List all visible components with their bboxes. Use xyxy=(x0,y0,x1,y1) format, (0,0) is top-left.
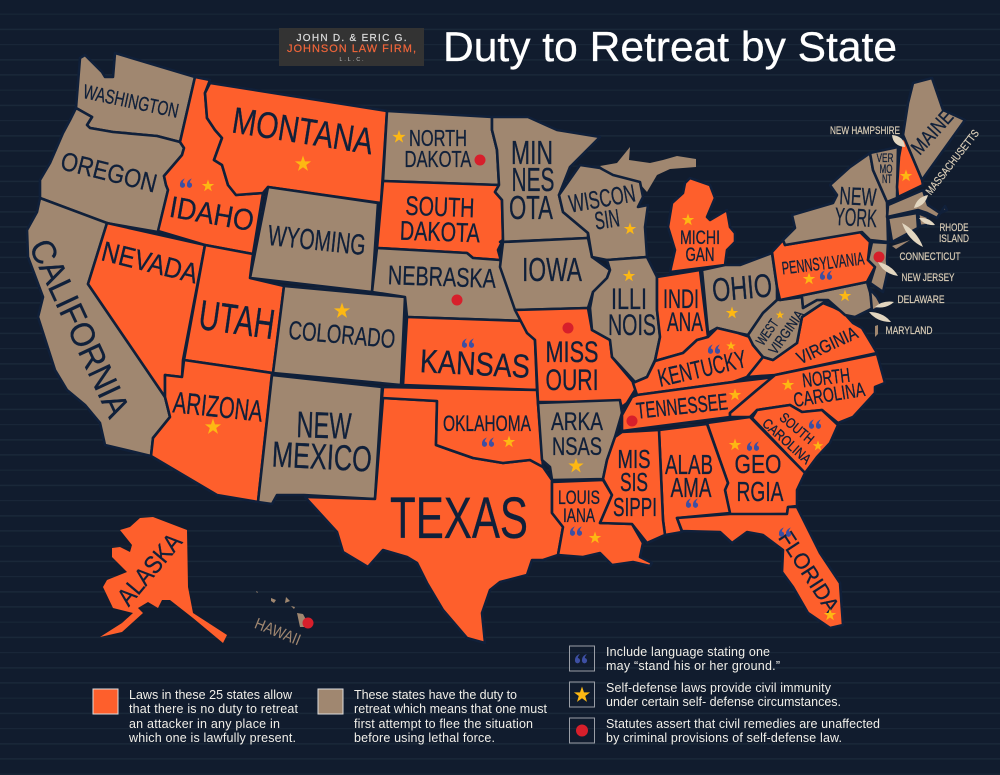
callout: Connecticut: CONNECTICUT xyxy=(900,251,961,263)
state: Missouri: MISS xyxy=(546,336,598,369)
state: Iowa xyxy=(500,238,610,310)
state: Michigan: MICHI xyxy=(680,228,720,249)
legend text: Laws in these 25 states allow xyxy=(129,688,293,702)
star marker xyxy=(682,214,694,225)
legend text: by criminal provisions of self-defense law. xyxy=(606,731,842,745)
callout: New Jersey xyxy=(878,262,955,284)
state: Mississippi: SIS xyxy=(620,467,648,497)
callout: Massachusetts xyxy=(914,128,982,208)
legend text: Statutes assert that civil remedies are unaffected xyxy=(606,717,880,731)
star marker xyxy=(503,436,515,447)
callout: New Hampshire: NEW HAMPSHIRE xyxy=(830,125,900,137)
state: Oklahoma: OKLAHOMA xyxy=(443,411,531,436)
state: Colorado xyxy=(273,286,405,385)
state: Minnesota: NES xyxy=(512,161,554,198)
star marker xyxy=(813,440,823,450)
star marker xyxy=(776,310,784,319)
logo: Johnson Law Firm: JOHNSON LAW FIRM, xyxy=(287,43,416,55)
state: Indiana: ANA xyxy=(667,307,703,337)
state: New Mexico: MEXICO xyxy=(271,433,373,480)
legend text: retreat which means that one must xyxy=(354,702,548,716)
state: Vermont: MO xyxy=(880,162,892,176)
state: Michigan: GAN xyxy=(686,245,714,266)
state: Minnesota xyxy=(492,117,600,242)
legend text: Include language stating one xyxy=(606,645,770,659)
quote marker xyxy=(809,420,821,429)
state: Alaska: ALASKA xyxy=(112,528,188,611)
state: Vermont: VER xyxy=(876,151,894,165)
state: Nebraska xyxy=(372,248,525,321)
state: Louisiana xyxy=(552,480,652,566)
legend text: under certain self- defense circumstances. xyxy=(606,695,841,709)
state: California: CALIFORNIA xyxy=(21,233,137,424)
state: Arizona xyxy=(151,360,272,502)
legend text: an attacker in any place in xyxy=(129,717,280,731)
state: Georgia: RGIA xyxy=(736,476,784,507)
state: Wisconsin and Michigan upper peninsula: SIN xyxy=(593,204,621,236)
state: Vermont xyxy=(870,147,898,202)
state: Montana xyxy=(205,83,387,203)
star marker xyxy=(334,302,350,318)
state: Virginia xyxy=(747,303,877,377)
legend: no duty to retreat xyxy=(93,688,299,745)
callout: Maryland: MARYLAND xyxy=(886,325,933,337)
state: Georgia xyxy=(707,417,805,515)
state: Hawaii: HAWAII xyxy=(252,616,303,649)
state: Michigan xyxy=(668,178,735,272)
state: Kansas xyxy=(403,317,537,390)
state: Mississippi: SIPPI xyxy=(613,492,657,522)
state: Virginia: VIRGINIA xyxy=(794,323,861,368)
legend: civil remedies xyxy=(570,717,880,745)
quote marker xyxy=(820,270,832,280)
state: New Jersey xyxy=(868,242,888,292)
state: Arizona: ARIZONA xyxy=(171,386,264,429)
state: North Dakota xyxy=(383,111,499,185)
state: Idaho: IDAHO xyxy=(167,191,256,238)
star marker xyxy=(782,378,794,390)
star marker xyxy=(729,438,741,450)
state: Connecticut xyxy=(888,213,918,242)
state: Alabama: AMA xyxy=(670,472,712,503)
state: South Carolina: SOUTH xyxy=(777,409,817,447)
legend icon: star xyxy=(570,682,594,707)
state: Ohio: OHIO xyxy=(711,266,774,309)
state: Minnesota: OTA xyxy=(509,189,553,226)
star marker xyxy=(623,270,635,281)
star marker xyxy=(726,306,738,318)
state: Louisiana: LOUIS xyxy=(558,488,600,509)
state: West Virginia xyxy=(748,297,828,360)
callout: Rhode Island: RHODE xyxy=(940,222,968,234)
state: California xyxy=(21,198,170,456)
state: Utah: UTAH xyxy=(196,291,278,348)
quote marker xyxy=(462,338,474,348)
state: Arkansas: NSAS xyxy=(552,433,602,461)
star marker xyxy=(568,458,584,472)
callout: New Jersey: NEW JERSEY xyxy=(902,272,955,284)
quote marker xyxy=(779,528,791,537)
state: Washington: WASHINGTON xyxy=(81,81,181,123)
state: Illinois: NOIS xyxy=(608,309,656,342)
state: Wyoming: WYOMING xyxy=(266,220,367,262)
state: Missouri xyxy=(515,308,637,407)
state: Texas: TEXAS xyxy=(390,486,528,551)
state: Pennsylvania xyxy=(772,232,875,300)
state: South Dakota: DAKOTA xyxy=(399,216,480,248)
state: Alabama xyxy=(659,424,730,535)
callout: Delaware xyxy=(875,294,944,307)
state: Kentucky xyxy=(633,328,763,395)
state: Maryland xyxy=(780,282,878,337)
state: Hawaii xyxy=(252,591,314,649)
state: New Mexico xyxy=(258,375,382,504)
callout: Connecticut xyxy=(900,223,961,263)
state: Oklahoma xyxy=(382,387,543,467)
star marker xyxy=(729,388,741,400)
callout: New Hampshire xyxy=(830,125,905,147)
state: New York: YORK xyxy=(834,203,878,233)
star marker xyxy=(624,222,636,234)
state: Washington xyxy=(76,53,195,142)
swatch: orange xyxy=(93,689,118,714)
state: Delaware xyxy=(870,289,882,311)
state: Colorado: COLORADO xyxy=(287,315,397,354)
legend text: which one is lawfully present. xyxy=(128,731,296,745)
state: Massachusetts xyxy=(887,190,947,218)
state: Wisconsin and Michigan upper peninsula: WISCON xyxy=(567,179,638,219)
star marker xyxy=(589,532,601,543)
star marker xyxy=(205,418,221,434)
state: New York: NEW xyxy=(839,182,877,212)
logo: Johnson Law Firm: JOHN D. & ERIC G. xyxy=(296,33,406,44)
legend text: may “stand his or her ground.” xyxy=(606,659,780,673)
logo: Johnson Law Firm xyxy=(279,28,424,66)
state: North Dakota: NORTH xyxy=(409,125,467,151)
star marker xyxy=(726,341,736,350)
state: Missouri: OURI xyxy=(546,364,598,397)
state: South Carolina: CAROLINA xyxy=(759,415,815,467)
state: Idaho xyxy=(158,77,263,254)
state: Arkansas xyxy=(538,400,622,480)
state: Georgia: GEO xyxy=(734,449,782,479)
logo: Johnson Law Firm: L.L.C. xyxy=(340,57,364,63)
state: West Virginia: WEST xyxy=(752,316,782,348)
state: Mississippi xyxy=(600,430,665,543)
star marker xyxy=(900,170,912,181)
dot marker xyxy=(452,294,462,306)
quote marker xyxy=(482,438,494,447)
star marker xyxy=(295,156,311,171)
callout: Rhode Island xyxy=(919,218,969,245)
state: South Carolina xyxy=(752,405,838,473)
state: Maine: MAINE xyxy=(907,106,958,159)
state: Illinois: ILLI xyxy=(611,283,647,316)
legend icon: quote xyxy=(570,646,594,671)
dot marker xyxy=(874,252,884,262)
state: New York xyxy=(783,153,910,249)
title: Duty to Retreat by State xyxy=(443,23,897,70)
state: Arkansas: ARKA xyxy=(551,408,603,436)
state: South Dakota xyxy=(377,181,503,268)
state: Minnesota: MIN xyxy=(511,134,553,171)
state: Utah xyxy=(184,245,284,373)
state: Wisconsin and Michigan upper peninsula xyxy=(559,147,696,260)
legend: stand your ground xyxy=(570,645,780,673)
state: Louisiana: IANA xyxy=(563,506,595,527)
state: Tennessee xyxy=(622,377,775,431)
state: Kentucky: KENTUCKY xyxy=(655,345,749,393)
quote marker xyxy=(747,442,759,451)
state: West Virginia: VIRGINIA xyxy=(765,307,807,357)
dot marker xyxy=(302,618,314,628)
state: Alaska xyxy=(100,517,227,643)
callout: Rhode Island: ISLAND xyxy=(939,233,969,245)
state: Iowa: IOWA xyxy=(522,251,582,288)
legend: civil immunity xyxy=(570,681,841,709)
state: Ohio xyxy=(702,253,777,335)
state: Illinois xyxy=(590,257,660,382)
state: Pennsylvania: PENNSYLVANIA xyxy=(781,249,865,278)
quote marker xyxy=(708,344,720,354)
state: North Carolina: NORTH xyxy=(801,365,851,392)
state: Montana: MONTANA xyxy=(230,100,376,162)
legend text: before using lethal force. xyxy=(354,731,495,745)
state: Tennessee: TENNESSEE xyxy=(635,388,729,424)
state: Wyoming xyxy=(250,187,378,292)
state: Oregon xyxy=(40,108,184,232)
state: Oregon: OREGON xyxy=(58,146,160,198)
star marker xyxy=(839,290,851,301)
legend: duty to retreat xyxy=(318,688,548,745)
state: Kansas: KANSAS xyxy=(419,342,531,385)
state: Vermont: NT xyxy=(882,172,892,186)
state: Alabama: ALAB xyxy=(665,449,713,480)
state: Nevada: NEVADA xyxy=(99,236,201,289)
quote marker xyxy=(180,178,192,188)
legend text: that there is no duty to retreat xyxy=(129,702,299,716)
state: Indiana: INDI xyxy=(663,284,699,314)
state: Rhode Island xyxy=(918,213,928,226)
legend text: first attempt to flee the situation xyxy=(354,717,533,731)
state: Indiana xyxy=(655,270,708,361)
star marker xyxy=(824,608,836,620)
state: Florida: FLORIDA xyxy=(773,527,845,618)
state: North Dakota: DAKOTA xyxy=(404,146,472,172)
star marker xyxy=(392,130,406,143)
state: Mississippi: MIS xyxy=(618,444,650,474)
legend text: These states have the duty to xyxy=(354,688,517,702)
state: New Mexico: NEW xyxy=(296,404,352,447)
star marker xyxy=(803,272,815,284)
swatch: tan xyxy=(318,689,343,714)
state: Nevada xyxy=(88,223,205,397)
state: New Hampshire xyxy=(897,135,923,197)
state: North Carolina xyxy=(730,354,885,423)
quote marker xyxy=(686,498,698,508)
quote marker xyxy=(570,526,582,536)
dot marker xyxy=(562,322,574,334)
legend icon: dot xyxy=(570,718,594,743)
state: North Carolina: CAROLINA xyxy=(792,379,867,412)
dot marker xyxy=(474,154,486,166)
dot marker xyxy=(626,416,638,426)
state: South Dakota: SOUTH xyxy=(405,191,475,223)
state: Nebraska: NEBRASKA xyxy=(387,260,496,294)
state: Texas xyxy=(305,398,563,643)
callout: Massachusetts: MASSACHUSETTS xyxy=(924,128,982,197)
state: Maine xyxy=(903,78,965,180)
state: Florida xyxy=(677,507,845,628)
star marker xyxy=(202,180,214,191)
callout: Delaware: DELAWARE xyxy=(898,294,944,306)
legend text: Self-defense laws provide civil immunity xyxy=(606,681,832,695)
callout: Maryland xyxy=(869,312,933,337)
